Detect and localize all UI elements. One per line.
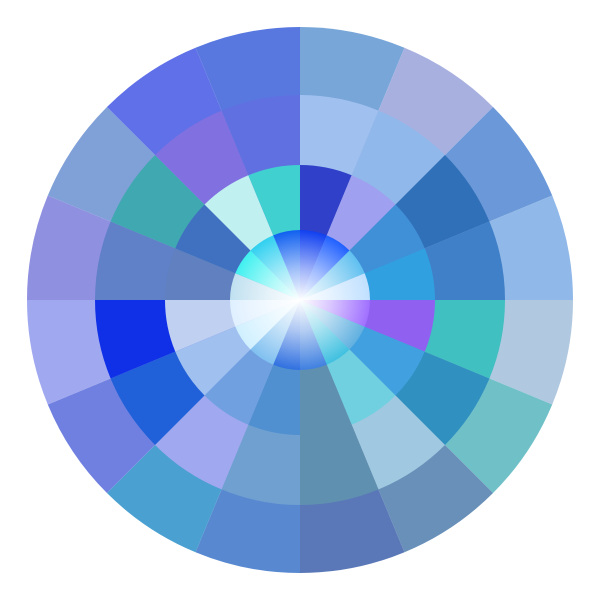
ring: second <box>165 165 435 435</box>
center glow <box>230 230 370 370</box>
ring: third <box>95 95 505 505</box>
ring: inner <box>230 230 370 370</box>
